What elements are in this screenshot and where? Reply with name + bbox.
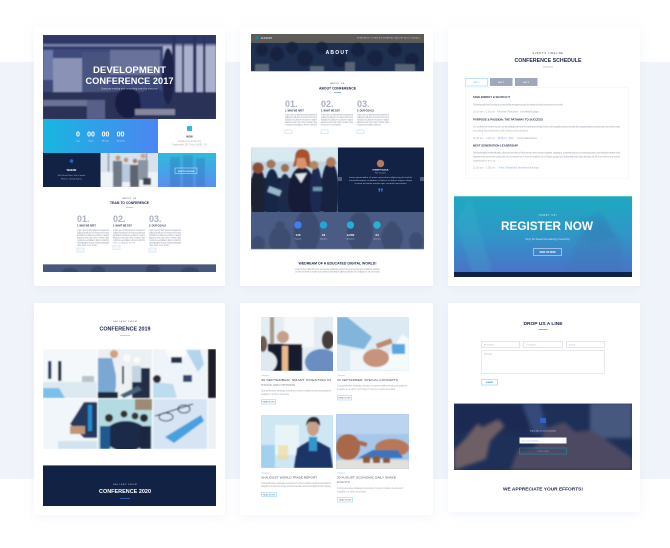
register banner — [454, 196, 632, 277]
schedule list: departments across the world with a lot of experience in how the leaders do not forget people and leadership with clear direction for all of our teams and events — [473, 156, 621, 158]
contact heading — [524, 321, 563, 330]
day tabs — [466, 78, 538, 86]
panel: home page — [34, 27, 225, 286]
schedule heading — [514, 52, 582, 67]
column 02: Lorem ipsum dolor sit amet consectetur — [321, 114, 353, 116]
about hero photo — [251, 34, 424, 72]
location block — [43, 153, 100, 187]
schedule list: PURPOSE & PASSION: THE PATHWAY TO SUCCESS — [473, 118, 543, 122]
schedule list: Alex Sandford — [499, 166, 518, 170]
column 02: incididunt ut labore et dolore magna — [113, 234, 146, 237]
column 02: 2. WHAT WE DO? — [321, 108, 340, 112]
column 03: aliqua ut enim ad minim veniam quis — [149, 236, 182, 240]
hero title: CONFERENCE 2017 — [86, 76, 174, 87]
column 03: adipiscing elit sed do eiusmod tempor — [149, 232, 181, 234]
column 02: 02. — [321, 99, 334, 109]
testimonial panel: ROBERT BLACK — [372, 168, 389, 172]
schedule list: NEXT GENERATION LEADERSHIP — [473, 144, 518, 148]
nav: HOME ABOUT SCHEDULE SPEAKERS GALLERY BLOG CONTACT — [357, 36, 421, 40]
hero title: DEVELOPMENT — [93, 65, 166, 76]
column 03: Lorem ipsum dolor sit amet consectetur — [149, 229, 181, 232]
stats band: 145 — [295, 233, 301, 237]
column 01: 1. WHO WE ARE? — [285, 108, 304, 112]
closing heading: WE APPRECIATE YOUR EFFORTS! — [503, 486, 583, 492]
article 2: Category — [337, 374, 345, 377]
column 01: incididunt ut labore et dolore magna — [285, 118, 318, 122]
schedule list: Beachfront Boutique — [518, 166, 540, 170]
contact form: First Name* — [484, 343, 495, 346]
contact heading: DROP US A LINE — [524, 321, 563, 327]
column 02: aliqua ut enim ad minim veniam quis — [321, 121, 354, 124]
column 03 — [149, 214, 182, 252]
column 01: nisi ut aliquip ex ea commodo consequat — [77, 242, 109, 244]
date block: Conference in the city — [178, 140, 202, 143]
schedule list: 11:00 am - 1:00 pm — [473, 166, 495, 170]
column 02: 02. — [113, 214, 126, 224]
article 1: Comprehensive strategic overview of current market trends and practices — [261, 390, 332, 392]
testimonial panel: Web Designer — [375, 172, 387, 174]
schedule list: Our conference session focuses on developing better teams, creating meaningful work and long lasting impact across all our project partners and people around the world — [473, 126, 621, 128]
article 3: 30 AUGUST: WORLD TRADE REPORT — [261, 476, 317, 480]
nav: ELEVENT — [261, 37, 273, 40]
day tabs: DAY 1 — [473, 81, 480, 84]
countdown — [43, 119, 158, 153]
article 4: insights in a short summary — [337, 490, 367, 494]
section heading: ABOUT US — [330, 82, 345, 85]
hero title — [86, 65, 174, 90]
column 03: 3. OUR GOALS — [149, 224, 166, 228]
newsletter banner: SUBSCRIBE — [537, 451, 549, 453]
article 1: 30 SEPTEMBER: SMART INVESTING IN — [261, 378, 331, 382]
column 01: 1. WHO WE ARE? — [77, 224, 96, 228]
day tabs: DAY 3 — [523, 81, 530, 84]
countdown: 00 — [87, 132, 95, 138]
column 03: nostrud exercitation ullamco — [357, 124, 382, 126]
column 01: 01. — [285, 99, 298, 109]
call to action tile: JOIN TO US NOW — [178, 171, 194, 173]
panel: contact page — [448, 303, 640, 512]
business people photo — [100, 153, 158, 187]
schedule list: Next generation leadership talks, ideas and a review of what people need across industries, organizing, understanding and connecting teams, and driving innovation in all — [473, 152, 620, 154]
blog photo: coins — [336, 414, 409, 469]
countdown: 00 — [117, 132, 124, 138]
closing heading — [295, 262, 381, 274]
section heading: ABOUT US — [122, 197, 137, 200]
column 03: duis aute irure dolor — [149, 244, 169, 247]
background band — [0, 62, 670, 479]
countdown: Day — [76, 140, 80, 142]
schedule list: Robert Ron — [498, 137, 515, 140]
column 01: nostrud exercitation ullamco laboris — [77, 239, 110, 242]
column 03: nostrud exercitation ullamco laboris — [149, 239, 182, 242]
article 4: EVENTS — [337, 480, 350, 484]
hero title: Business meeting and networking event for everyone — [101, 88, 158, 90]
countdown: 0 — [76, 132, 80, 138]
testimonial panel: ” — [378, 186, 384, 200]
column 03 — [357, 99, 390, 134]
column 01: aliqua ut enim ad minim veniam quis — [77, 236, 110, 240]
schedule list: Andrew Fletcher — [497, 110, 518, 114]
schedule list: organization at a co. — [473, 160, 496, 162]
contact form: E-mail* — [569, 344, 576, 346]
blog photo: executive — [261, 317, 333, 371]
day tabs: DAY 2 — [498, 81, 505, 84]
schedule heading: CONFERENCE SCHEDULE — [514, 58, 582, 64]
countdown: Seconds — [117, 140, 124, 142]
countdown: Minutes — [102, 140, 109, 142]
article 2: 30 SEPTEMBER: SPECIAL CONCEPTS — [337, 378, 398, 382]
photo: huddle — [98, 399, 152, 451]
about title: ABOUT — [326, 50, 349, 56]
testimonial panel: eiusmod tempor incididunt ut labore et dolore magna aliqua — [349, 179, 413, 182]
stats band: 3,230 — [347, 233, 355, 237]
register banner: REGISTER NOW — [501, 219, 594, 233]
column 02 — [113, 214, 146, 250]
schedule list: including big industries with ideas and practices — [473, 130, 529, 132]
schedule list: 10:00 am - 1:00 pm — [473, 110, 495, 114]
newsletter banner: Your email address — [522, 440, 539, 442]
location block: WHERE — [67, 168, 77, 172]
column 01: 01. — [77, 214, 90, 224]
gallery heading: GALLERY FROM — [113, 320, 137, 323]
testimonial panel: ut enim ad minim veniam quis nostrud exercitation — [354, 182, 407, 185]
newsletter banner — [454, 403, 632, 470]
column 02: adipiscing elit sed do eiusmod tempor — [113, 232, 145, 234]
column 03: 03. — [357, 99, 370, 109]
column 03: Lorem ipsum dolor sit amet consectetur — [357, 114, 389, 116]
gallery heading — [100, 320, 151, 336]
closing heading: ut enim ad minim veniam quis nostrud exercitation ullamco laboris nisi ut aliquip ex ea commodo — [295, 270, 381, 274]
contact form: Last Name* — [526, 343, 537, 346]
column 02 — [321, 99, 354, 134]
section heading: TEAM TO CONFERENCE — [110, 201, 150, 205]
article 4: Category — [337, 472, 345, 474]
article 4: 30 AUGUST: ECONOMIC DAILY SHAKE — [337, 476, 396, 480]
register banner: Only 10 Seats Remaining Currently! — [525, 237, 570, 241]
conference 2020 banner: GALLERY FROM — [113, 483, 137, 486]
article 4: Comprehensive strategic overview of current market trends and — [337, 487, 404, 490]
call to action tile — [158, 153, 216, 187]
photo: glasses and charts — [153, 399, 216, 449]
stats band: Projects — [295, 238, 301, 240]
schedule heading: EVENT'S TIMELINE — [533, 52, 563, 55]
stats band: 18 — [322, 233, 325, 237]
section heading — [110, 197, 150, 208]
column 01 — [285, 99, 318, 134]
register banner: HURRY UP! — [539, 214, 557, 217]
contact form — [482, 342, 604, 385]
column 03: 03. — [149, 214, 162, 224]
team photo — [251, 148, 338, 212]
stats band — [251, 212, 424, 250]
column 03: aliqua ut enim ad minim veniam quis — [357, 121, 390, 124]
column 01: Lorem ipsum dolor sit amet consectetur — [285, 114, 317, 116]
stats band: Sponsors — [373, 238, 381, 240]
blog photo: tablet — [337, 317, 409, 371]
photo: handshake in office — [43, 349, 97, 398]
schedule list: 11:00 am - 1:00 pm — [473, 137, 495, 140]
column 02: Lorem ipsum dolor sit amet consectetur — [113, 229, 145, 232]
column 02: nisi ut aliquip ex ea — [113, 242, 136, 244]
countdown: 00 — [102, 132, 109, 138]
article 3: READ MORE — [263, 494, 276, 496]
stats band: Attendees — [346, 238, 355, 240]
footer photo strip — [43, 264, 216, 272]
newsletter banner: Subscribe to our newsletter — [530, 430, 557, 432]
hero photo — [43, 35, 216, 119]
column 01: aliqua ut enim ad minim veniam quis — [285, 121, 318, 124]
article 3: Category — [261, 472, 269, 474]
column 01: duis aute irure dolor — [77, 244, 97, 247]
column 03: incididunt ut labore et dolore magna — [149, 234, 182, 237]
article 4: READ MORE — [339, 499, 352, 502]
article 3: insights in a short summary of recent results, trends and data for the industry — [261, 485, 332, 488]
article 2: insights in a short summary of recent results and data — [337, 388, 396, 391]
location block: 500 Street New York Central — [58, 174, 86, 177]
photo: desk top view — [153, 349, 216, 398]
section heading — [319, 82, 356, 93]
register banner: SIGN UP NOW — [539, 251, 556, 254]
column 03: adipiscing elit sed do eiusmod tempor — [357, 116, 389, 119]
contact form: Message — [484, 354, 493, 356]
date block: NOW — [186, 134, 193, 138]
column 02: 2. WHAT WE DO? — [113, 224, 132, 228]
article 1: Category — [261, 374, 269, 377]
article 1: insights in a short summary — [261, 393, 290, 396]
article 2: Comprehensive strategic overview of current market trends and practices — [337, 384, 408, 388]
contact form: SUBMIT — [486, 382, 494, 384]
photo: man with tablet — [43, 399, 97, 449]
column 03: incididunt ut labore et dolore magna — [357, 118, 390, 122]
section heading: ABOUT CONFERENCE — [319, 86, 356, 90]
panel: gallery page — [34, 303, 225, 515]
article 3 — [261, 472, 332, 496]
schedule list: Greenfield Boutique — [520, 110, 540, 114]
column 01: adipiscing elit sed do eiusmod tempor — [285, 116, 317, 119]
column 01: adipiscing elit sed do eiusmod tempor — [77, 232, 109, 234]
column 02: adipiscing elit sed do eiusmod tempor — [321, 116, 353, 119]
conference 2020 banner — [43, 465, 216, 506]
column 02: aliqua ut enim ad minim veniam quis — [113, 236, 146, 240]
column 02: nostrud exercitation — [321, 124, 342, 126]
location block: Hall 01, United States — [61, 178, 83, 180]
article 2 — [337, 374, 408, 400]
column 01 — [77, 214, 110, 252]
article 2: READ MORE — [338, 397, 351, 400]
column 02: incididunt ut labore et dolore magna — [321, 118, 354, 122]
testimonial panel: Lorem ipsum dolor sit amet consectetur adipiscing elit sed do — [349, 176, 413, 179]
testimonial panel — [338, 148, 424, 212]
photo: team with hard hats — [98, 349, 152, 398]
panel: about page — [240, 27, 433, 286]
schedule list: Following with web development technical strengths across the latest technical conference schedule — [473, 104, 564, 106]
panel: blog page — [240, 303, 433, 515]
column 03: 3. OUR GOALS — [357, 108, 374, 112]
closing heading: Lorem ipsum dolor sit amet consectetur adipiscing elit sed do eiusmod tempor incididunt ut labore — [295, 268, 381, 271]
column 02: nostrud exercitation ullamco laboris — [113, 239, 146, 242]
closing heading: WEDREAM OF A EDUCATED DIGITAL WORLD! — [298, 262, 376, 266]
column 01: nostrud exercitation ullamco laboris — [285, 124, 318, 126]
gallery heading: CONFERENCE 2019 — [100, 326, 151, 332]
article 4 — [337, 472, 404, 502]
schedule list: SAVE ENERGY & SEARCH IT — [473, 95, 510, 99]
date block — [172, 126, 207, 146]
conference 2020 banner: CONFERENCE 2020 — [99, 489, 151, 495]
article 3: Comprehensive strategic overview of current market trends and practices — [261, 482, 332, 485]
schedule list: Crown Marketplace — [517, 137, 538, 140]
article 1: STOCK AND OPTIONS — [261, 383, 295, 387]
photo grid — [43, 349, 216, 451]
column 01: incididunt ut labore et dolore magna — [77, 234, 110, 237]
date block: September 2017 from 09:00 - 18 — [172, 144, 207, 146]
article 1 — [261, 374, 332, 404]
column 03: nisi ut aliquip ex ea commodo consequat — [149, 242, 181, 244]
article 1: READ MORE — [262, 401, 275, 404]
stats band: 24 — [375, 233, 379, 237]
panel: schedule page — [448, 27, 640, 286]
schedule list — [466, 88, 628, 178]
blog photo: man in suit — [261, 415, 333, 468]
column 01: Lorem ipsum dolor sit amet consectetur — [77, 229, 109, 232]
stats band: Speakers — [320, 238, 327, 240]
countdown: Hours — [88, 140, 94, 142]
nav — [255, 36, 421, 40]
